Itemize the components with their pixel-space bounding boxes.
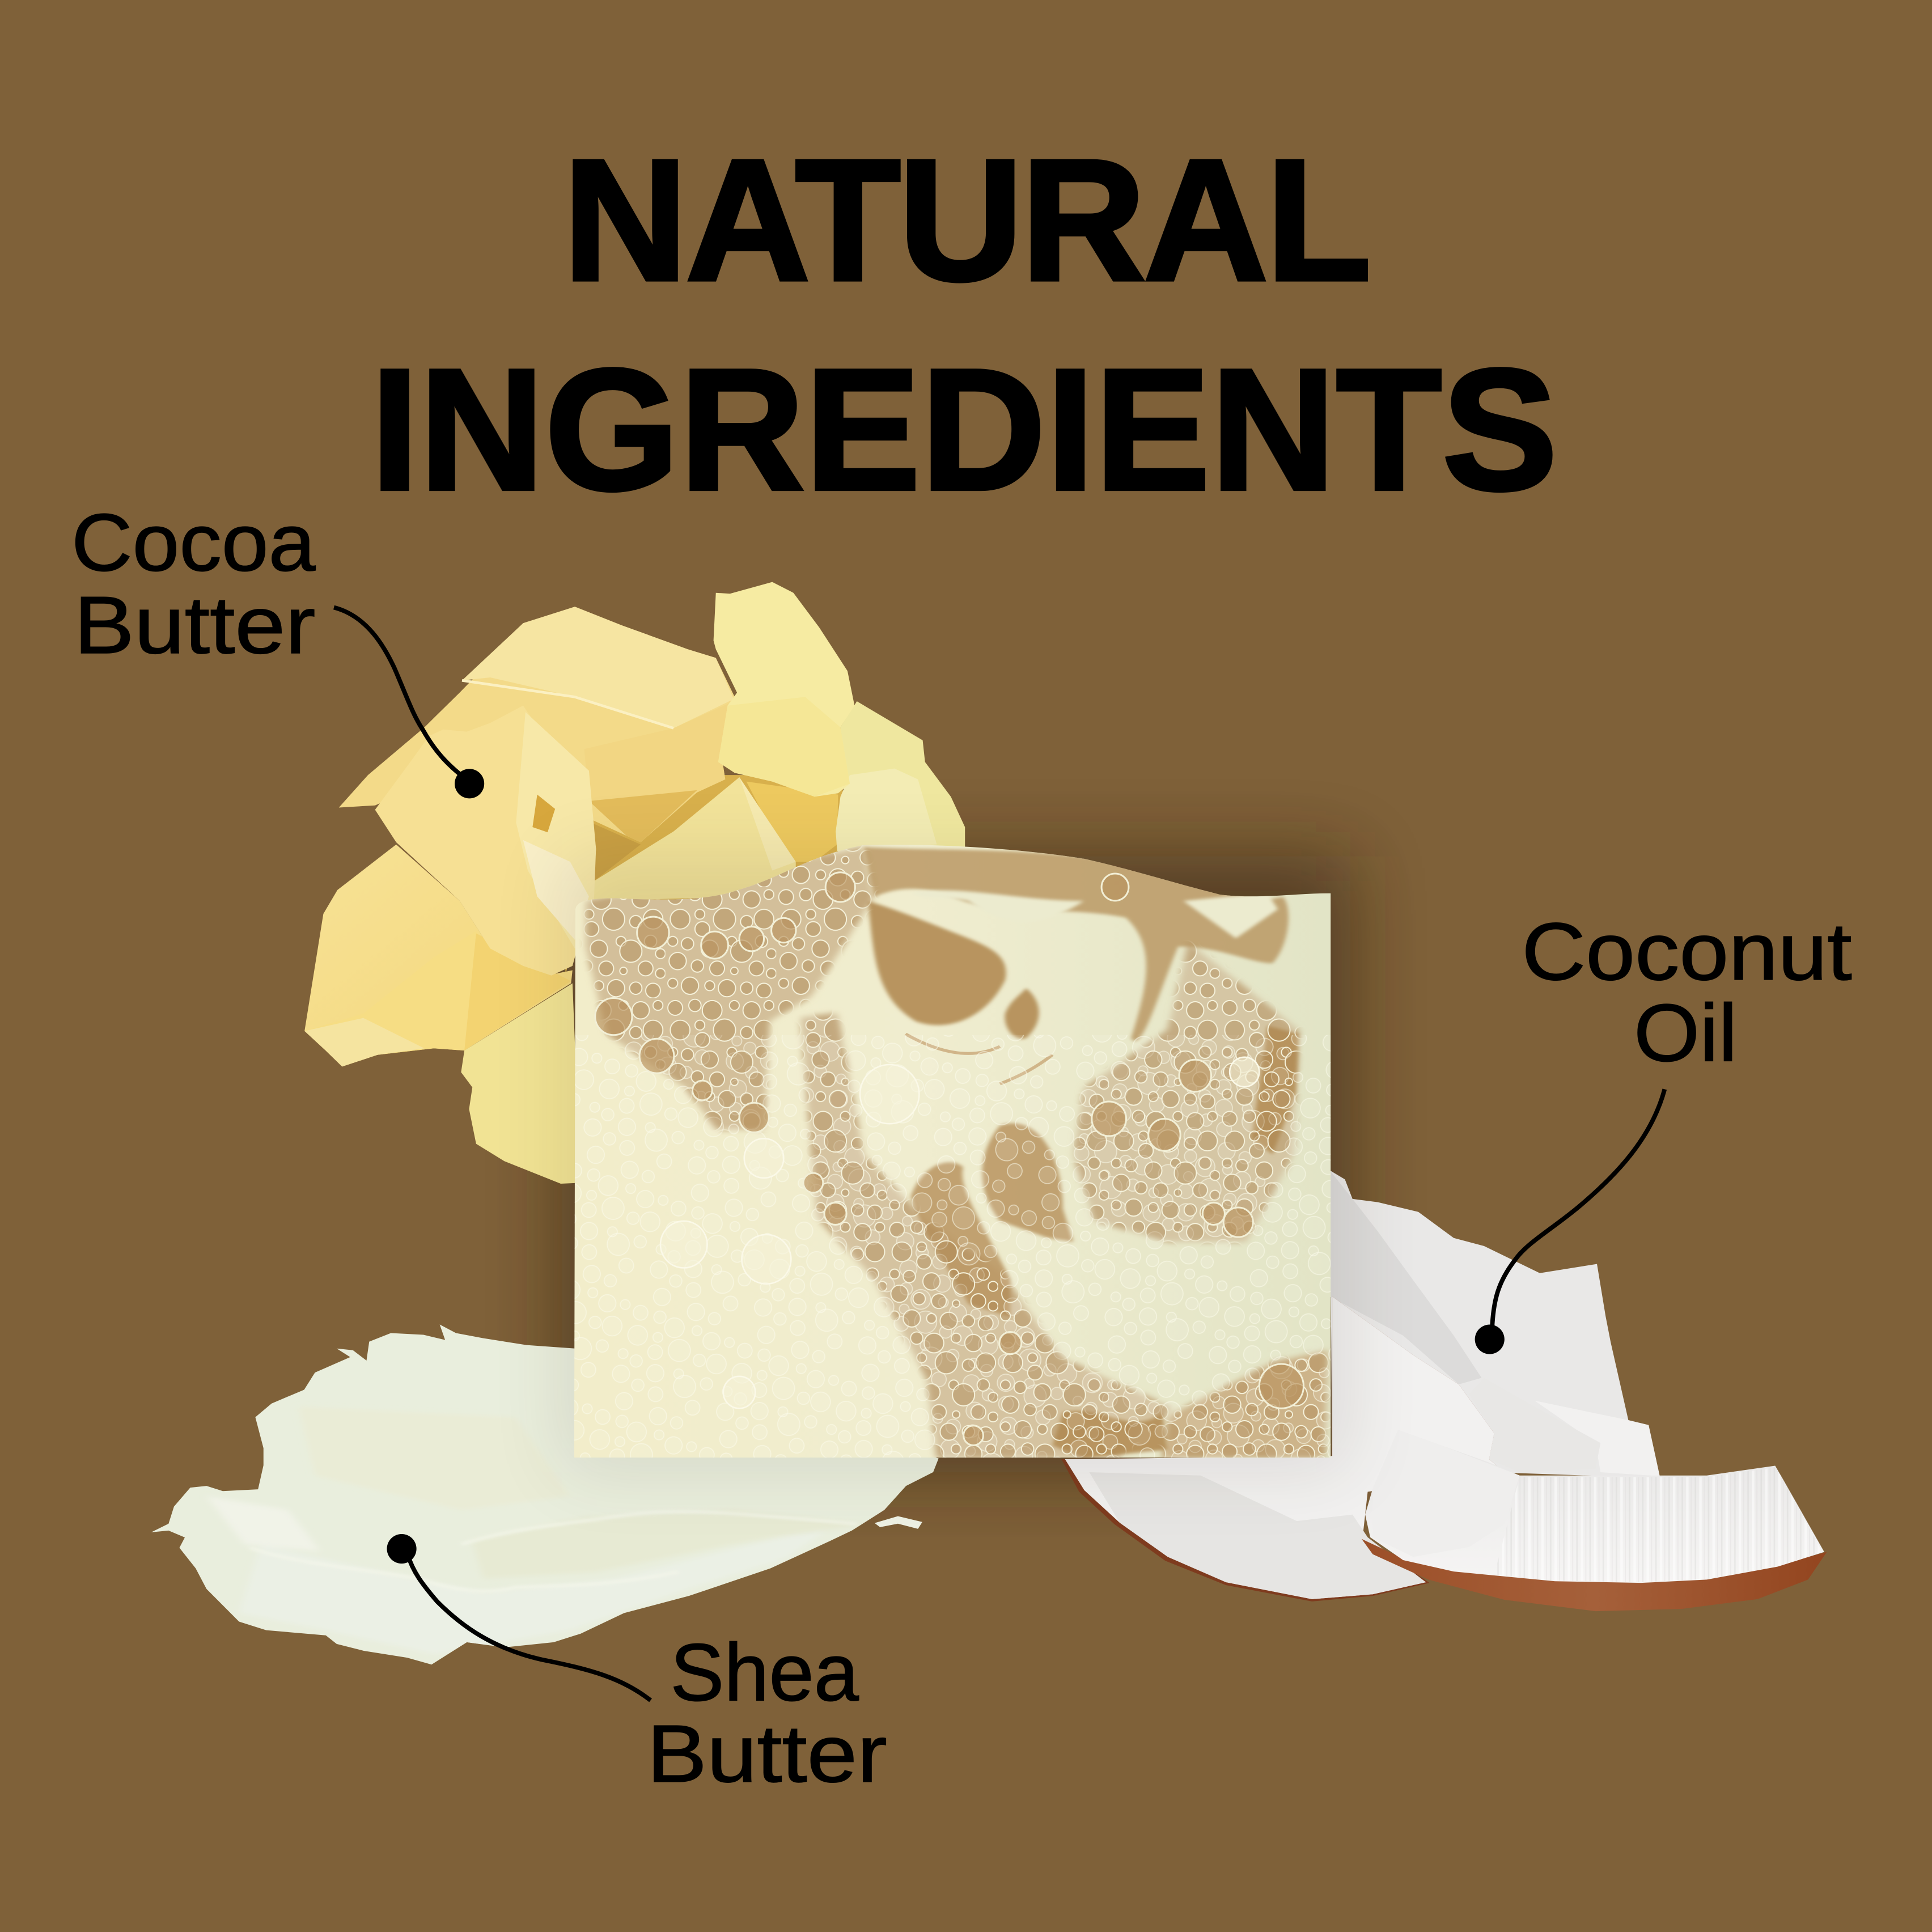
soap body xyxy=(574,838,1333,1460)
swirl: solid brown shapes xyxy=(863,847,1299,1458)
faint soap shadow on ingredients xyxy=(562,857,1350,1472)
label: coconut oil xyxy=(1522,906,1852,1078)
coconut: front round xyxy=(1061,1297,1505,1601)
title xyxy=(371,124,1557,526)
title: INGREDIENTS xyxy=(371,334,1557,526)
callout: shea butter xyxy=(387,1534,887,1799)
soap swirls xyxy=(586,847,1328,1458)
swirl: frothy brown regions xyxy=(586,847,1328,1458)
title: NATURAL xyxy=(563,124,1371,316)
label: cocoa butter: Cocoa xyxy=(71,497,316,588)
leader line xyxy=(334,608,466,779)
chunk: left lower xyxy=(304,845,573,1066)
chunk: bottom xyxy=(461,983,581,1184)
leader line xyxy=(1492,1089,1664,1328)
image: shea butter smear xyxy=(151,1324,939,1664)
chunk: top large xyxy=(339,607,735,842)
coconut: centre chunk xyxy=(1469,1378,1600,1472)
soap bubbles xyxy=(595,872,1304,1445)
chunk: front with callout dot xyxy=(375,706,596,976)
swirl: cream marbling xyxy=(911,890,1278,938)
infographic canvas xyxy=(75,159,1852,1783)
label: coconut oil: Oil xyxy=(1634,988,1738,1078)
froth texture on brown regions xyxy=(574,838,1333,1460)
chunk: centre lower xyxy=(594,777,796,901)
chunk: right cluster xyxy=(836,701,965,853)
coconut: wedge flesh xyxy=(1365,1430,1824,1583)
soap drop shadow on background xyxy=(562,857,1350,1472)
smear highlights xyxy=(214,1500,862,1654)
leader line xyxy=(408,1555,651,1700)
image: cocoa butter chunks xyxy=(304,582,965,1184)
label: cocoa butter: Butter xyxy=(74,580,315,671)
label: shea butter: Shea xyxy=(670,1627,859,1718)
image: coconut pieces xyxy=(1061,1170,1827,1611)
image: soap bar xyxy=(574,838,1333,1460)
label: cocoa butter xyxy=(71,497,316,671)
flake xyxy=(875,1516,922,1529)
pale bubbles on cream soap xyxy=(660,1057,1259,1408)
callout dot xyxy=(455,769,484,798)
coconut: wedge crust xyxy=(1362,1539,1827,1611)
label: shea butter: Butter xyxy=(647,1709,887,1799)
callout: coconut oil xyxy=(1475,906,1852,1354)
cocoa backing xyxy=(565,775,843,975)
callout dot xyxy=(1475,1324,1505,1354)
chunk: top right xyxy=(714,582,854,796)
callout dot xyxy=(387,1534,417,1564)
chunk: rear yellow xyxy=(747,782,838,862)
coconut: rear shell xyxy=(1330,1170,1660,1476)
froth texture on whole soap xyxy=(574,1035,1333,1460)
label: shea butter xyxy=(647,1627,887,1799)
shaded gap between chunks xyxy=(591,823,641,882)
label: coconut oil: Coconut xyxy=(1522,906,1852,997)
swirl: thin brown veins xyxy=(905,1034,1052,1084)
callout: cocoa butter xyxy=(71,497,484,798)
